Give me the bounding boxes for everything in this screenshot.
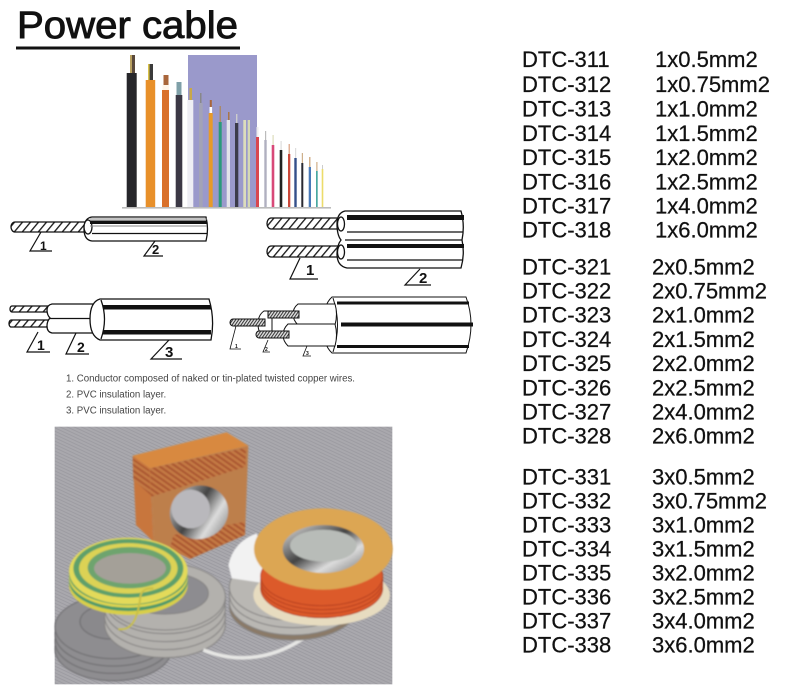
labels: two core round: 3 bbox=[165, 344, 173, 361]
spec list: 2-core: 2x1.5mm2 bbox=[652, 327, 755, 352]
photo of cable reels bbox=[55, 427, 393, 684]
spec list: 1-core: DTC-314 bbox=[522, 121, 611, 146]
spec list: 1-core: DTC-311 bbox=[522, 47, 610, 72]
spec list: 2-core: DTC-327 bbox=[522, 400, 611, 424]
spec list: 3-core: DTC-332 bbox=[522, 488, 611, 514]
spec list: 3-core: DTC-335 bbox=[522, 560, 611, 586]
cable sample photo strip bbox=[122, 55, 331, 209]
spec list: 1-core: 1x1.0mm2 bbox=[655, 96, 758, 122]
icon: cardboard box bbox=[133, 432, 248, 559]
spec list: 2-core: DTC-321 bbox=[522, 254, 611, 280]
spec list: 1-core: DTC-318 bbox=[522, 218, 611, 242]
icon: grey coil left bbox=[55, 595, 172, 681]
icon: white cable bbox=[203, 628, 317, 658]
spec list: 1-core: 1x0.75mm2 bbox=[655, 72, 770, 97]
spec list: 1-core: DTC-317 bbox=[522, 194, 611, 218]
icon: white flange bbox=[253, 564, 390, 626]
labels: two core round: 1 bbox=[37, 337, 45, 353]
spec list: 1-core: 1x2.0mm2 bbox=[655, 145, 758, 170]
spec list: 3-core: 3x2.5mm2 bbox=[652, 584, 755, 610]
icon: grey coil middle bbox=[105, 563, 225, 658]
labels: single core: 2 bbox=[152, 242, 159, 257]
diagram: two core flat cable bbox=[267, 211, 464, 268]
spec list: 3-core: 3x1.5mm2 bbox=[652, 536, 755, 562]
spec list: 3-core: 3x4.0mm2 bbox=[652, 608, 755, 634]
icon: grey spool bbox=[228, 533, 357, 640]
spec list: 1-core: 1x4.0mm2 bbox=[655, 194, 758, 218]
labels: three core: 2 bbox=[265, 347, 268, 353]
labels: two core: 1 bbox=[306, 262, 314, 279]
spec list: 3-core: 3x2.0mm2 bbox=[652, 560, 755, 586]
spec list: 3-core: DTC-336 bbox=[522, 584, 611, 610]
spec list: 3-core: DTC-338 bbox=[522, 632, 611, 658]
spec list: 2-core: DTC-328 bbox=[522, 424, 611, 448]
spec list: 1-core: DTC-315 bbox=[522, 145, 611, 170]
icon: red wire bbox=[261, 547, 383, 618]
spec list: 1-core: DTC-312 bbox=[522, 72, 611, 97]
spec list: 1-core: 1x6.0mm2 bbox=[655, 218, 758, 242]
spec list: 3-core: DTC-337 bbox=[522, 608, 611, 634]
title: Power cable bbox=[17, 5, 238, 47]
labels: three core: 1 bbox=[235, 344, 238, 350]
labels: two core: 2 bbox=[419, 270, 427, 287]
legend text: 1. Conductor composed of naked or tin-plated twisted copper wires. bbox=[66, 374, 355, 384]
legend text bbox=[66, 374, 355, 416]
spec list: 2-core bbox=[522, 254, 767, 448]
spec list: 2-core: DTC-323 bbox=[522, 302, 611, 328]
spec list: 2-core: 2x2.0mm2 bbox=[652, 351, 755, 376]
spec list: 3-core: DTC-334 bbox=[522, 536, 611, 562]
labels: single core: 1 bbox=[40, 239, 47, 253]
spec list: 3-core: DTC-331 bbox=[522, 464, 611, 490]
spec list: 2-core: 2x6.0mm2 bbox=[652, 424, 755, 448]
legend text: 3. PVC insulation layer. bbox=[66, 406, 166, 416]
labels: two core round bbox=[27, 332, 182, 361]
spec list: 2-core: DTC-322 bbox=[522, 278, 611, 304]
spec list: 2-core: DTC-324 bbox=[522, 327, 611, 352]
spec list: 2-core: 2x2.5mm2 bbox=[652, 376, 755, 400]
labels: two core round: 2 bbox=[77, 339, 85, 355]
spec list: 3-core: 3x0.75mm2 bbox=[652, 488, 767, 514]
spec list: 2-core: DTC-326 bbox=[522, 376, 611, 400]
icon: yellow-green coil bbox=[69, 538, 188, 629]
spec list: 2-core: 2x0.5mm2 bbox=[652, 254, 755, 280]
spec list: 3-core: 3x6.0mm2 bbox=[652, 632, 755, 658]
spec list: 2-core: 2x1.0mm2 bbox=[652, 302, 755, 328]
spec list: 1-core: 1x0.5mm2 bbox=[655, 47, 758, 72]
spec list: 1-core: 1x1.5mm2 bbox=[655, 121, 758, 146]
spec list: 3-core: 3x0.5mm2 bbox=[652, 464, 755, 490]
spec list: 3-core: DTC-333 bbox=[522, 512, 611, 538]
spec list: 3-core bbox=[522, 464, 767, 658]
spec list: 3-core: 3x1.0mm2 bbox=[652, 512, 755, 538]
spec list: 1-core bbox=[522, 47, 770, 242]
labels: three core: 3 bbox=[306, 351, 309, 357]
diagram: two core round cable bbox=[9, 299, 213, 340]
spec list: 2-core: 2x4.0mm2 bbox=[652, 400, 755, 424]
icon: reel top flange bbox=[254, 508, 393, 590]
spec list: 2-core: DTC-325 bbox=[522, 351, 611, 376]
labels: three core bbox=[230, 326, 311, 357]
spec list: 2-core: 2x0.75mm2 bbox=[652, 278, 767, 304]
spec list: 1-core: DTC-313 bbox=[522, 96, 611, 122]
labels: single core bbox=[30, 232, 163, 257]
spec list: 1-core: DTC-316 bbox=[522, 170, 611, 194]
diagram: single core cable bbox=[11, 217, 208, 241]
labels: two core bbox=[290, 258, 431, 287]
spec list: 1-core: 1x2.5mm2 bbox=[655, 170, 758, 194]
diagram: three core round cable bbox=[230, 297, 473, 353]
legend text: 2. PVC insulation layer. bbox=[66, 390, 166, 400]
